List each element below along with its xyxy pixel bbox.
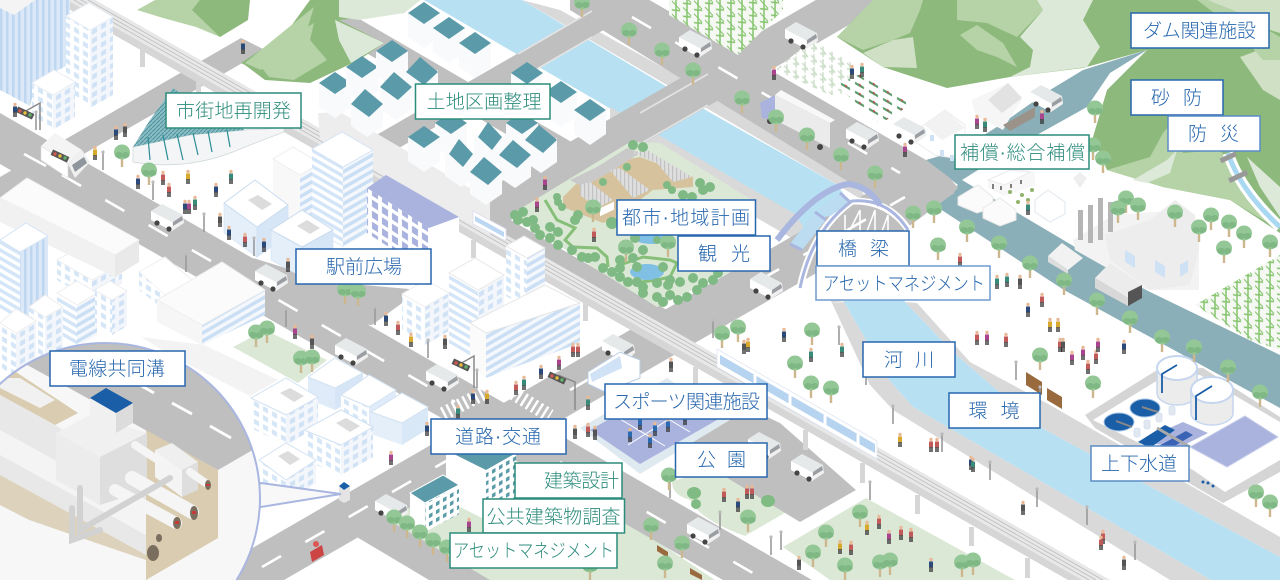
- white cube apartments: [251, 358, 428, 503]
- right mountains: [837, 0, 1280, 233]
- label: erosion control: 砂防: [1151, 87, 1202, 109]
- sabo dams: [1219, 151, 1248, 183]
- bridge railings: [518, 11, 708, 144]
- label: asset management (buildings): [450, 533, 617, 568]
- court players: [628, 411, 687, 448]
- top-left towers: [0, 0, 113, 130]
- crosswalks: [443, 392, 550, 416]
- civic buildings: [410, 430, 516, 532]
- label: common utility duct: [50, 351, 185, 386]
- purple building: [367, 175, 459, 273]
- label: parks: [676, 443, 767, 477]
- vehicles: [41, 22, 1063, 545]
- label: asset management (bridges): アセットマネジメント: [823, 274, 985, 295]
- label: roads and traffic: [431, 419, 566, 454]
- label: dam facilities: [1131, 13, 1269, 48]
- tomato rows: [836, 72, 915, 124]
- label: public building survey: 公共建築物調査: [486, 506, 620, 528]
- lower-left long buildings: [0, 178, 278, 396]
- people: [13, 40, 1126, 572]
- scooter: [310, 541, 324, 562]
- station canopy: [318, 112, 490, 235]
- river: [424, 0, 1280, 580]
- mountain stream: [1228, 153, 1280, 227]
- label: asset management (buildings): アセットマネジメント: [453, 541, 614, 562]
- factory: [1073, 198, 1199, 290]
- label: water and sewerage: [1091, 446, 1189, 481]
- park: Japanese garden: [510, 140, 752, 307]
- label: land readjustment: [416, 84, 550, 119]
- label: environment: [949, 393, 1040, 428]
- park bushes: [687, 487, 775, 509]
- benches: [657, 372, 1062, 580]
- label: sports facilities: [605, 384, 767, 419]
- corn field top: [669, 0, 783, 55]
- lawns: [233, 330, 1015, 580]
- label: erosion control: [1131, 80, 1223, 115]
- train on viaduct: [717, 349, 877, 459]
- label: architectural design: [515, 463, 622, 498]
- magnifier pointer: [240, 483, 341, 507]
- label: station plaza: [296, 249, 431, 284]
- label: asset management (bridges): [816, 266, 990, 300]
- label: dam facilities: ダム関連施設: [1143, 20, 1256, 42]
- label: water and sewerage: 上下水道: [1101, 453, 1177, 475]
- label: rivers: [863, 342, 955, 377]
- left hills: [137, 0, 420, 83]
- label: environment: 環境: [968, 400, 1020, 422]
- label: bridges: [817, 231, 909, 266]
- hall: urban redevelopment building: [133, 88, 284, 165]
- label: urban and regional planning: 都市·地域計画: [622, 207, 750, 229]
- label: station plaza: 駅前広場: [326, 256, 402, 278]
- label: disaster prevention: 防災: [1188, 123, 1239, 145]
- sports court: [580, 378, 730, 474]
- label: roads and traffic: 道路·交通: [455, 426, 541, 448]
- label: urban redevelopment: 市街地再開発: [176, 100, 291, 122]
- houses with teal roofs: [319, 2, 606, 205]
- magnifier: utility tunnel: [0, 340, 341, 580]
- bridge arch: [777, 184, 910, 288]
- tank truck: [1095, 263, 1142, 306]
- village houses: [958, 168, 1087, 226]
- label: compensation: 補償·総合補償: [960, 142, 1085, 164]
- label: parks: 公園: [697, 450, 746, 471]
- low white wing and towers around station: [224, 132, 373, 277]
- street lamps: [34, 110, 1137, 560]
- label: tourism: 観光: [698, 243, 750, 265]
- container stack: [1048, 243, 1083, 274]
- train near station: [473, 211, 506, 241]
- corn field right: [1195, 255, 1280, 350]
- label: public building survey: [483, 499, 624, 533]
- label: common utility duct: 電線共同溝: [69, 358, 165, 380]
- traffic signals: [16, 103, 575, 410]
- label: architectural design: 建築設計: [544, 470, 619, 492]
- label: bridges: 橋梁: [838, 238, 889, 260]
- label: compensation: [955, 135, 1089, 169]
- label: disaster prevention: [1168, 116, 1260, 151]
- street utility box: [339, 482, 350, 503]
- label: urban redevelopment: [166, 93, 301, 128]
- roads: [0, 0, 958, 580]
- road markings: [24, 17, 905, 580]
- label: sports facilities: スポーツ関連施設: [613, 391, 760, 413]
- label: rivers: 河川: [884, 349, 934, 371]
- label: land readjustment: 土地区画整理: [426, 91, 542, 113]
- water treatment plant: [1085, 356, 1280, 503]
- white and striped blocks near crossing: [402, 236, 580, 378]
- vegetable field: [775, 40, 855, 95]
- label: tourism: [678, 236, 770, 271]
- label: urban and regional planning: [617, 200, 756, 235]
- canal: [926, 50, 1280, 408]
- compensation area houses: [917, 83, 1035, 161]
